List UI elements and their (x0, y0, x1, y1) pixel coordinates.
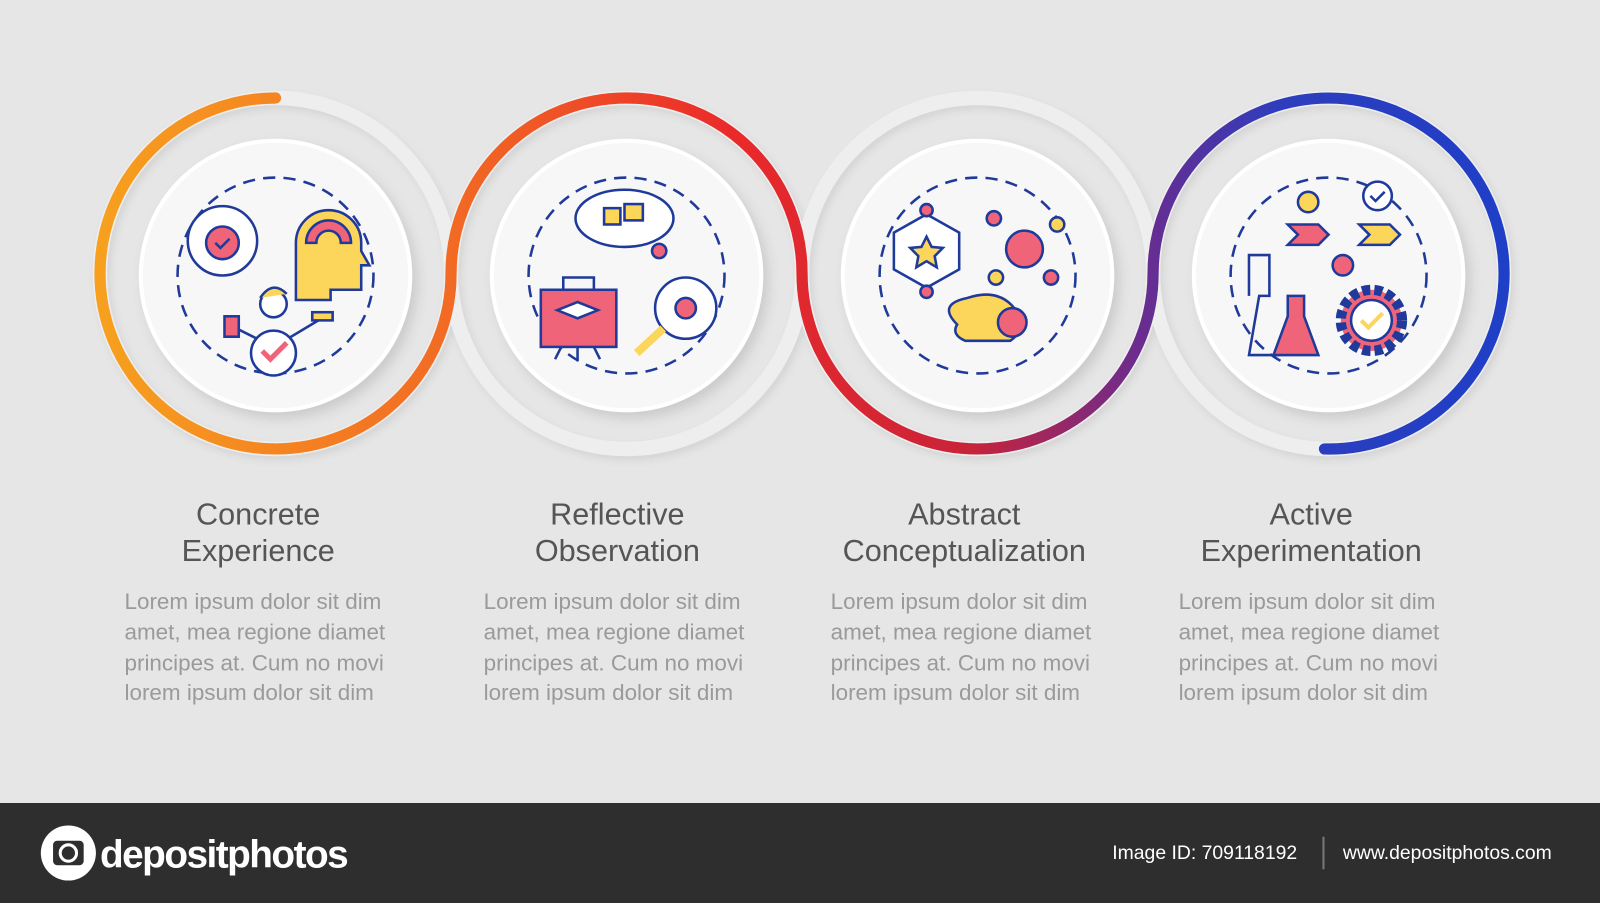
column body text: Lorem ipsum dolor sit dim (1179, 589, 1435, 614)
column body text: principes at. Cum no movi (484, 650, 743, 675)
column titles: Experimentation (1201, 534, 1422, 568)
pale rings (100, 98, 1504, 449)
column titles: Observation (535, 534, 700, 568)
column titles: Reflective (550, 497, 685, 531)
icon: reflective observation (529, 178, 724, 373)
column body text: lorem ipsum dolor sit dim (831, 680, 1080, 705)
column body text: principes at. Cum no movi (831, 650, 1090, 675)
column body text: Lorem ipsum dolor sit dim (484, 589, 741, 614)
column body text (124, 589, 1440, 705)
column body text: Lorem ipsum dolor sit dim (831, 589, 1087, 614)
column titles (182, 497, 1422, 568)
column titles: Concrete (196, 497, 320, 531)
footer (0, 803, 1600, 903)
column titles: Active (1270, 497, 1353, 531)
column body text: amet, mea regione diamet (1179, 620, 1440, 645)
colored loop path (100, 98, 1504, 449)
column body text: amet, mea regione diamet (484, 620, 745, 645)
footer: depositphotos (100, 833, 347, 876)
footer: Image ID: 709118192 (1112, 842, 1297, 864)
column titles: Experience (182, 534, 335, 568)
column body text: lorem ipsum dolor sit dim (484, 680, 733, 705)
column body text: amet, mea regione diamet (831, 620, 1092, 645)
icon: active experimentation (1231, 178, 1427, 373)
footer: www.depositphotos.com (1342, 842, 1552, 864)
icon: abstract conceptualization (880, 178, 1076, 373)
column titles: Abstract (908, 497, 1021, 531)
column body text: lorem ipsum dolor sit dim (124, 680, 374, 705)
column body text: Lorem ipsum dolor sit dim (124, 589, 381, 614)
column titles: Conceptualization (843, 534, 1086, 568)
column body text: amet, mea regione diamet (124, 620, 386, 645)
icon: concrete experience (178, 178, 373, 375)
white discs (141, 141, 1463, 410)
column body text: lorem ipsum dolor sit dim (1179, 680, 1428, 705)
column body text: principes at. Cum no movi (124, 650, 384, 675)
column body text: principes at. Cum no movi (1179, 650, 1438, 675)
